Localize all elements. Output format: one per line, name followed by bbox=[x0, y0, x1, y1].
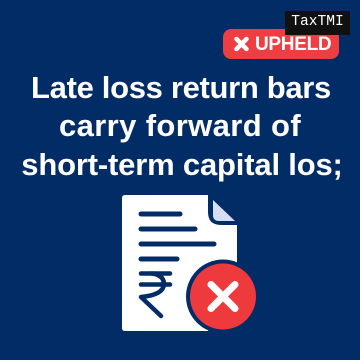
icon: document with rupee and red cross bbox=[122, 195, 256, 331]
watermark: TaxTMI bbox=[285, 11, 350, 35]
page fold bbox=[213, 200, 235, 221]
title bbox=[21, 70, 343, 182]
icon: badge x bbox=[234, 36, 249, 52]
text lines bbox=[141, 214, 214, 259]
title line 3: short-term capital los; bbox=[21, 147, 343, 182]
red cross circle bbox=[186, 260, 260, 334]
title line 2: carry forward of bbox=[59, 108, 301, 143]
watermark: TaxTMI: TaxTMI bbox=[291, 14, 344, 30]
badge label: UPHELD bbox=[255, 34, 331, 55]
title line 1: Late loss return bars bbox=[31, 70, 331, 105]
badge: upheld bbox=[223, 29, 339, 59]
document page bbox=[122, 195, 237, 331]
rupee symbol bbox=[141, 274, 170, 316]
